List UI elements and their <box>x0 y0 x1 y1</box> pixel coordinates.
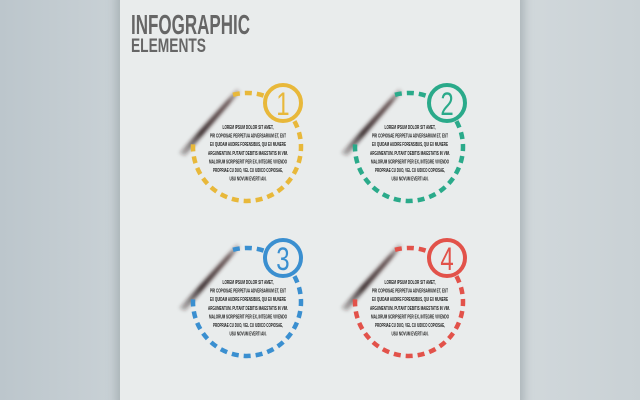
badge 4: 4 <box>440 241 454 277</box>
badge 3: 3 <box>276 241 290 277</box>
element 3: blue circle <box>179 240 301 356</box>
badge 1: 1 <box>276 86 290 122</box>
page panel <box>116 0 524 400</box>
element 2: teal circle <box>341 85 465 201</box>
badge 2: 2 <box>440 86 454 122</box>
element 1: yellow circle <box>179 85 301 201</box>
text 3 <box>208 280 288 338</box>
text 1 <box>208 125 288 183</box>
title: ELEMENTS <box>131 35 206 57</box>
title <box>131 9 250 57</box>
text 2 <box>370 125 450 183</box>
element 4: red circle <box>341 240 465 356</box>
text 4 <box>370 280 450 338</box>
title: INFOGRAPHIC <box>131 9 250 40</box>
